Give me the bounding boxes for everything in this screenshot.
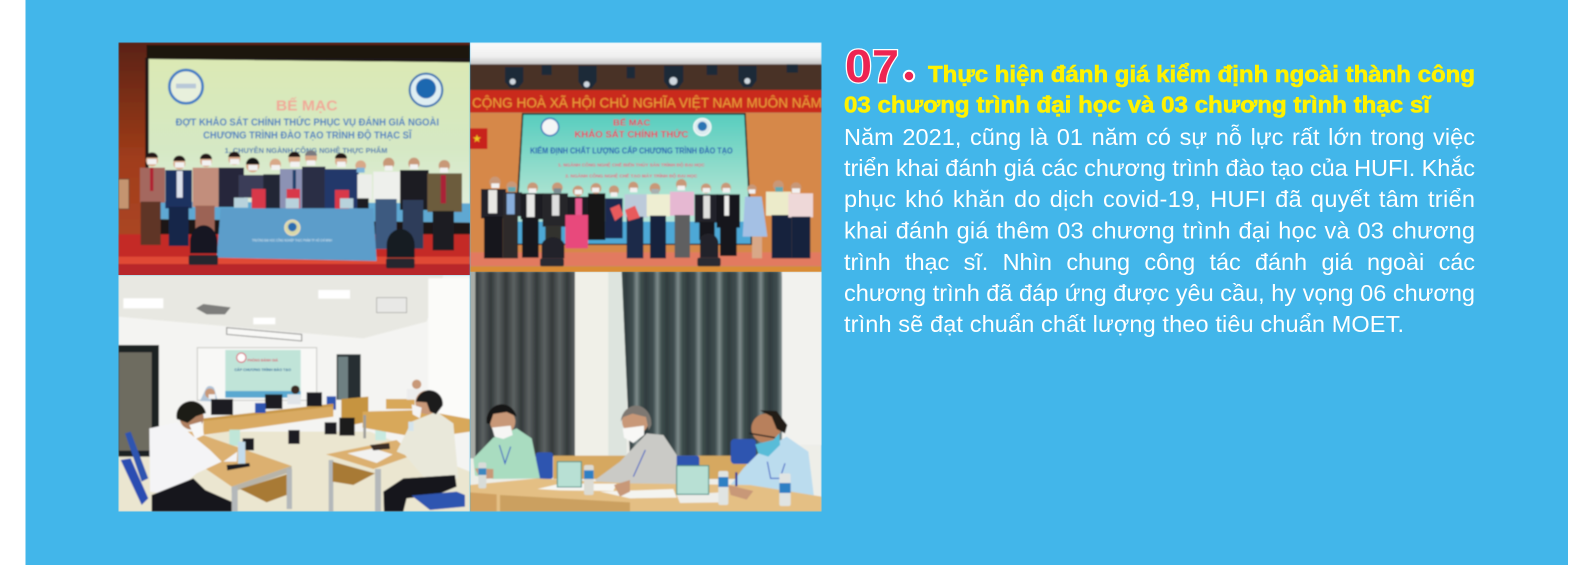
photo: evaluation meeting in computer room: PHÒNG ĐÁNH GIÁ bbox=[247, 358, 278, 363]
body text paragraph: trình thạc sĩ. Nhìn chung công tác đánh giá ngoài các bbox=[844, 249, 1475, 275]
body text paragraph: chương trình đã đáp ứng được yêu cầu, hy vọng 06 chương bbox=[844, 280, 1475, 306]
body text paragraph: Năm 2021, cũng là 01 năm có sự nỗ lực rất lớn trong việc bbox=[844, 124, 1475, 150]
heading: evaluation title bbox=[844, 61, 1475, 118]
photo: survey closing with group portrait: 1. NGÀNH CÔNG NGHỆ CHẾ BIẾN THỦY SẢN TRÌNH ĐỘ ĐẠI HỌC bbox=[558, 161, 705, 169]
heading bullet dot bbox=[904, 71, 914, 81]
photo: closing ceremony with signing table: CHƯƠNG TRÌNH ĐÀO TẠO TRÌNH ĐỘ THẠC SĨ bbox=[203, 128, 413, 141]
photo: survey closing with group portrait: 2. NGÀNH CÔNG NGHỆ CHẾ TẠO MÁY TRÌNH ĐỘ ĐẠI HỌC bbox=[565, 171, 698, 179]
photo: closing ceremony with signing table bbox=[118, 42, 470, 277]
photo: three evaluators at table bbox=[470, 272, 822, 512]
photo: evaluation meeting in computer room: CẤP CHƯƠNG TRÌNH ĐÀO TẠO bbox=[234, 367, 291, 372]
heading: evaluation title: Thực hiện đánh giá kiểm định ngoài thành công bbox=[928, 61, 1475, 87]
photo: survey closing with group portrait: CỘNG HOÀ XÃ HỘI CHỦ NGHĨA VIỆT NAM MUÔN NĂM bbox=[472, 96, 822, 111]
photo: evaluation meeting in computer room bbox=[118, 275, 470, 512]
photo: closing ceremony with signing table: 1. CHUYÊN NGÀNH CÔNG NGHỆ THỰC PHẨM bbox=[225, 146, 387, 155]
body text paragraph: khai đánh giá thêm 03 chương trình đại học và 03 chương bbox=[844, 218, 1475, 244]
photo: closing ceremony with signing table: BẾ MẠC bbox=[276, 97, 338, 114]
photo: survey closing with group portrait: BẾ MẠC bbox=[613, 118, 651, 128]
body text paragraph bbox=[844, 124, 1475, 337]
photo: survey closing with group portrait bbox=[470, 42, 822, 273]
heading: evaluation title: 03 chương trình đại học và 03 chương trình thạc sĩ bbox=[844, 92, 1432, 118]
photo: survey closing with group portrait: KIỂM ĐỊNH CHẤT LƯỢNG CẤP CHƯƠNG TRÌNH ĐÀO TẠO bbox=[530, 144, 733, 155]
body text paragraph: phục khó khăn do dịch covid-19, HUFI đã quyết tâm triển bbox=[844, 186, 1475, 212]
photo: survey closing with group portrait: KHẢO SÁT CHÍNH THỨC bbox=[574, 128, 689, 139]
body text paragraph: trình sẽ đạt chuẩn chất lượng theo tiêu chuẩn MOET. bbox=[844, 311, 1404, 337]
photo: closing ceremony with signing table: TRƯỜNG ĐẠI HỌC CÔNG NGHIỆP THỰC PHẨM TP. HỒ CHÍ MINH bbox=[252, 238, 332, 243]
heading number 07: 07 bbox=[845, 40, 899, 92]
body text paragraph: triển khai đánh giá các chương trình đào tạo của HUFI. Khắc bbox=[844, 155, 1475, 181]
photo: closing ceremony with signing table: ĐỢT KHẢO SÁT CHÍNH THỨC PHỤC VỤ ĐÁNH GIÁ NGOÀI bbox=[176, 116, 439, 129]
photo: survey closing with group portrait: ★ bbox=[473, 134, 482, 144]
